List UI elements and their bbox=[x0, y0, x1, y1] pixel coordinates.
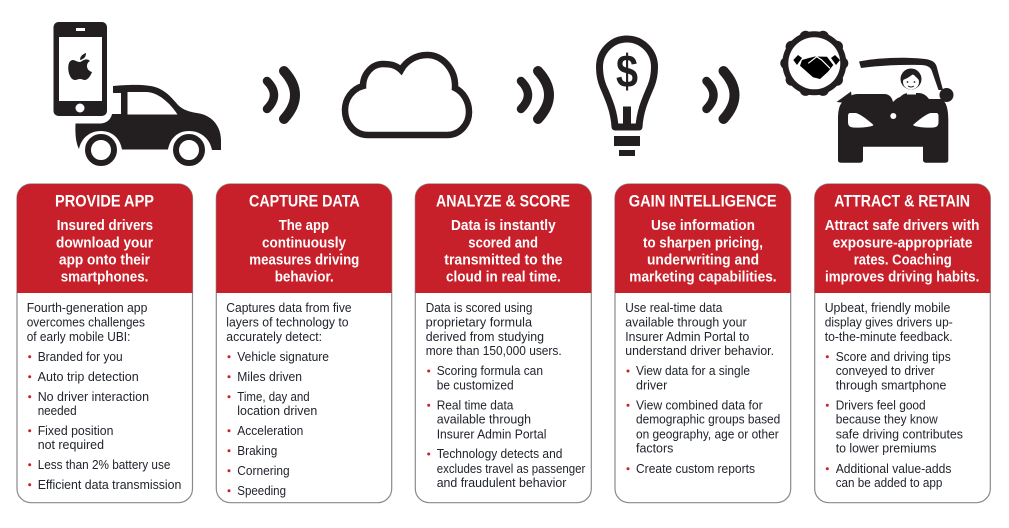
panel: provide app bbox=[17, 184, 192, 503]
summary text: underwriting and bbox=[647, 252, 759, 268]
summary text bbox=[249, 218, 359, 286]
intro text: more than 150,000 users. bbox=[426, 344, 562, 358]
summary text: scored and bbox=[468, 235, 538, 251]
intro text: Data is scored using bbox=[426, 301, 532, 315]
icon: signal waves 2 bbox=[521, 71, 549, 119]
intro text: proprietary formula bbox=[426, 316, 532, 330]
panel: capture data bbox=[216, 184, 392, 503]
panel: analyze and score bbox=[415, 184, 591, 503]
intro text bbox=[27, 301, 147, 344]
bullet list: excludes travel as passenger bbox=[437, 462, 585, 476]
summary text: to sharpen pricing, bbox=[643, 235, 763, 251]
panel: gain intelligence bbox=[615, 184, 791, 503]
summary text: continuously bbox=[262, 235, 346, 251]
icon: car front view with driver bbox=[836, 58, 954, 163]
summary text bbox=[56, 218, 153, 286]
bullet list: available through bbox=[437, 413, 531, 427]
bullet list: Braking bbox=[237, 444, 277, 458]
summary text bbox=[825, 218, 979, 286]
heading: provide app: PROVIDE APP bbox=[55, 193, 154, 211]
red header band bbox=[415, 184, 591, 293]
heading: gain intelligence: GAIN INTELLIGENCE bbox=[629, 193, 777, 211]
bullet list: No driver interaction bbox=[38, 390, 149, 404]
intro text: Insurer Admin Portal to bbox=[625, 330, 749, 344]
bullet list: location driven bbox=[237, 404, 317, 418]
summary text: rates. Coaching bbox=[854, 252, 952, 268]
summary text: app onto their bbox=[59, 252, 150, 268]
bullet list: Time, day and bbox=[237, 390, 310, 404]
bullet list bbox=[28, 350, 181, 492]
bullet list: safe driving contributes bbox=[836, 428, 963, 442]
summary text: Data is instantly bbox=[451, 218, 556, 234]
icon: smartphone with apple logo bbox=[54, 22, 107, 116]
icon: cloud bbox=[345, 55, 469, 135]
bullet list: to lower premiums bbox=[836, 442, 936, 456]
bullet list: Branded for you bbox=[38, 350, 123, 364]
bullet list: can be added to app bbox=[836, 476, 942, 490]
summary text bbox=[629, 218, 777, 286]
icon: handshake badge bbox=[780, 31, 848, 96]
intro text: accurately detect: bbox=[226, 330, 322, 344]
summary text: Attract safe drivers with bbox=[825, 218, 979, 234]
bullet list: Drivers feel good bbox=[836, 399, 926, 413]
bullet list bbox=[626, 364, 780, 476]
icon: light bulb with dollar sign: $ bbox=[616, 45, 638, 97]
intro text: Captures data from five bbox=[226, 301, 352, 315]
intro text: to-the-minute feedback. bbox=[825, 330, 953, 344]
intro text bbox=[426, 301, 562, 358]
bullet list: on geography, age or other bbox=[636, 428, 779, 442]
icon: car side view bbox=[75, 85, 221, 163]
bullet list: Miles driven bbox=[237, 370, 302, 384]
summary text: transmitted to the bbox=[444, 252, 563, 268]
intro text: layers of technology to bbox=[226, 316, 349, 330]
bullet list: Efficient data transmission bbox=[38, 478, 181, 492]
bullet list: and fraudulent behavior bbox=[437, 476, 566, 490]
heading: analyze and score: ANALYZE & SCORE bbox=[436, 193, 570, 211]
summary text: exposure-appropriate bbox=[833, 235, 972, 251]
bullet list: driver bbox=[636, 379, 667, 393]
intro text: derived from studying bbox=[426, 330, 544, 344]
bullet list: Insurer Admin Portal bbox=[437, 428, 546, 442]
icon: signal waves 3 bbox=[706, 71, 734, 119]
panel: attract and retain bbox=[815, 184, 990, 503]
icon: signal waves 1 bbox=[267, 71, 295, 119]
heading: capture data: CAPTURE DATA bbox=[249, 193, 360, 211]
summary text: behavior. bbox=[275, 270, 334, 286]
intro text: of early mobile UBI: bbox=[27, 330, 130, 344]
bullet list: demographic groups based bbox=[636, 413, 780, 427]
bullet list bbox=[228, 350, 329, 498]
intro text bbox=[825, 301, 953, 344]
icon: light bulb with dollar sign bbox=[600, 39, 654, 156]
bullet list bbox=[826, 350, 963, 490]
intro text bbox=[226, 301, 352, 344]
summary text: improves driving habits. bbox=[825, 270, 979, 286]
summary text: measures driving bbox=[249, 252, 359, 268]
bullet list: Technology detects and bbox=[437, 447, 562, 461]
intro text: available through your bbox=[625, 316, 747, 330]
bullet list: Fixed position bbox=[38, 424, 113, 438]
summary text: cloud in real time. bbox=[446, 270, 561, 286]
summary text: The app bbox=[279, 218, 329, 234]
summary text: Use information bbox=[651, 218, 755, 234]
summary text: marketing capabilities. bbox=[629, 270, 777, 286]
summary text: smartphones. bbox=[61, 270, 148, 286]
bullet list: Create custom reports bbox=[636, 462, 755, 476]
intro text bbox=[625, 301, 774, 358]
summary text: download your bbox=[56, 235, 153, 251]
red header band bbox=[216, 184, 392, 293]
red header band bbox=[615, 184, 791, 293]
intro text: overcomes challenges bbox=[27, 316, 145, 330]
intro text: understand driver behavior. bbox=[625, 344, 774, 358]
intro text: Upbeat, friendly mobile bbox=[825, 301, 950, 315]
bullet list: conveyed to driver bbox=[836, 364, 935, 378]
bullet list: Scoring formula can bbox=[437, 364, 543, 378]
bullet list: not required bbox=[38, 438, 104, 452]
bullet list: View combined data for bbox=[636, 399, 763, 413]
heading: attract and retain: ATTRACT & RETAIN bbox=[834, 193, 970, 211]
bullet list: Vehicle signature bbox=[237, 350, 329, 364]
bullet list: needed bbox=[38, 404, 77, 418]
summary text bbox=[444, 218, 563, 286]
bullet list: View data for a single bbox=[636, 364, 750, 378]
bullet list: be customized bbox=[437, 379, 514, 393]
summary text: Insured drivers bbox=[57, 218, 153, 234]
bullet list: Real time data bbox=[437, 399, 513, 413]
bullet list bbox=[427, 364, 585, 490]
bullet list: Acceleration bbox=[237, 424, 303, 438]
intro text: Fourth-generation app bbox=[27, 301, 147, 315]
bullet list: Cornering bbox=[237, 464, 290, 478]
intro text: display gives drivers up- bbox=[825, 316, 953, 330]
red header band bbox=[815, 184, 990, 293]
bullet list: Score and driving tips bbox=[836, 350, 951, 364]
bullet list: through smartphone bbox=[836, 379, 946, 393]
red header band bbox=[17, 184, 192, 293]
bullet list: Speeding bbox=[237, 484, 286, 498]
bullet list: Additional value-adds bbox=[836, 462, 951, 476]
bullet list: factors bbox=[636, 442, 673, 456]
bullet list: Less than 2% battery use bbox=[38, 458, 170, 472]
bullet list: because they know bbox=[836, 413, 939, 427]
intro text: Use real-time data bbox=[625, 301, 722, 315]
bullet list: Auto trip detection bbox=[38, 370, 139, 384]
